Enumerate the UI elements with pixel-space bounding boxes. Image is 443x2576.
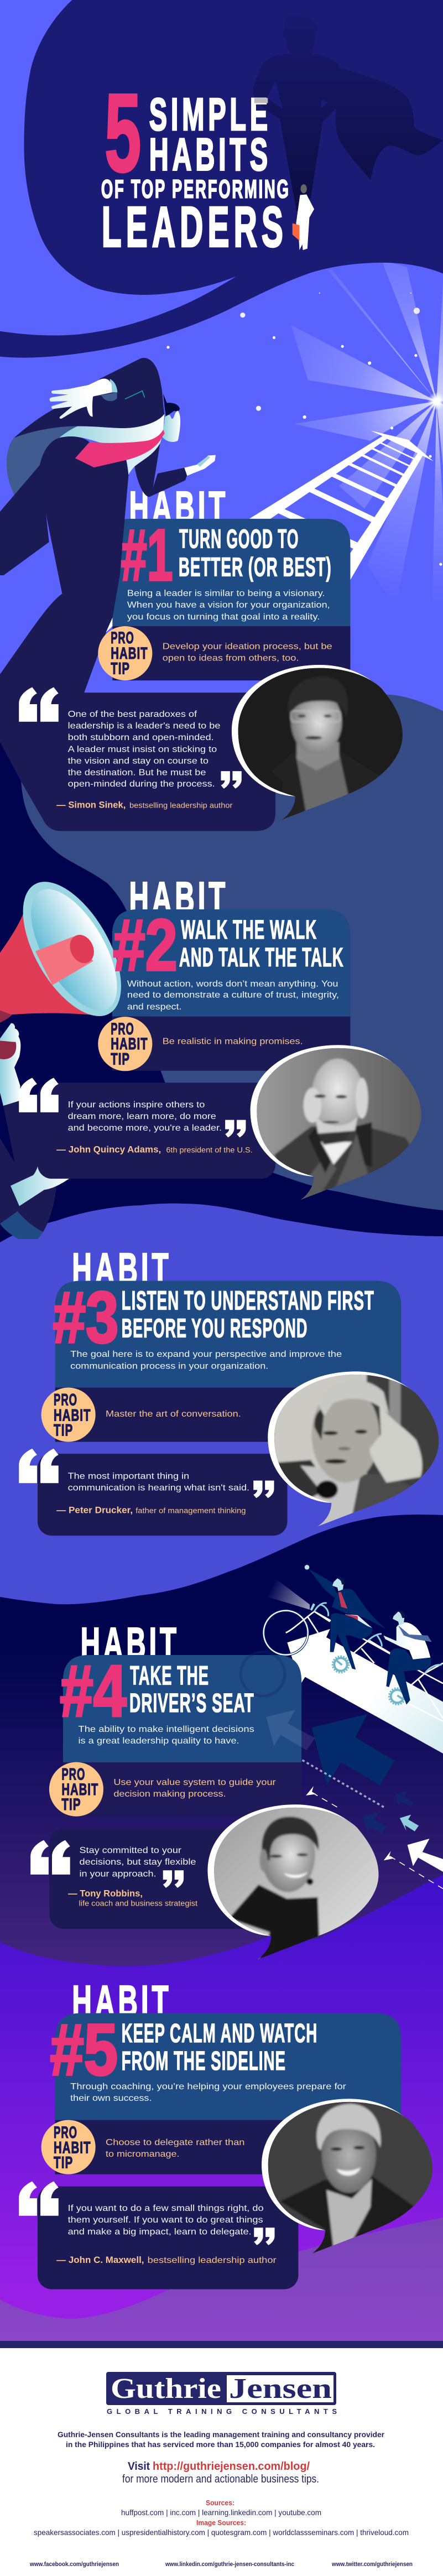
icon: opening quote	[30, 1840, 70, 1875]
panel: habit 1 text	[19, 514, 410, 831]
logo: Guthrie Jensen: Guthrie	[111, 2373, 221, 2405]
card	[55, 1281, 401, 1442]
heading: habit 5 word: HABIT	[72, 1976, 172, 2026]
light rays from star	[291, 260, 443, 607]
badge: pro habit tip: PRO	[61, 1765, 85, 1783]
logo: Guthrie Jensen	[106, 2372, 337, 2416]
text block: Drucker quote	[68, 1472, 249, 1492]
section 5 lower wave	[0, 2218, 443, 2341]
text block: sources: Sources:	[206, 2499, 234, 2507]
badge: pro habit tip: PRO	[54, 1391, 77, 1409]
badge: pro habit tip	[98, 1017, 152, 1071]
badge: pro habit tip: HABIT	[111, 644, 148, 663]
attribution: John C. Maxwell: bestselling leadership author	[148, 2256, 277, 2265]
text block: habit 3 description: communication process in your organization.	[70, 1361, 268, 1371]
rider 1	[309, 1569, 337, 1599]
text block: habit 2 description: and respect.	[127, 1002, 181, 1012]
text block: Robbins quote: Stay committed to your	[80, 1846, 182, 1855]
text block: Adams quote: and become more, you're a leader.	[68, 1123, 222, 1133]
bike frames	[286, 1611, 443, 1721]
badge: pro habit tip: HABIT	[54, 2138, 91, 2157]
icon: closing quote	[253, 1481, 274, 1498]
text block: habit 3 description: The goal here is to expand your perspective and improve the	[70, 1350, 342, 1359]
heading: walk the walk: WALK THE WALK	[181, 915, 317, 945]
badge: pro habit tip: TIP	[54, 1421, 73, 1439]
heading: turn good to better	[179, 524, 332, 582]
text block: visit blog: Visit	[128, 2460, 150, 2473]
text block: sources: huffpost.com | inc.com | learning.linkedin.com | youtube.com	[121, 2508, 321, 2517]
panel: habit 2 text	[19, 904, 428, 1207]
heading: number 2: #2	[113, 904, 178, 986]
text block: habit 4 tip	[113, 1778, 276, 1799]
logo: Guthrie Jensen: Jensen	[229, 2373, 332, 2405]
section 3 background	[0, 1204, 443, 1604]
text block: social links: www.linkedin.com/guthrie-jensen-consultants-inc	[165, 2561, 294, 2568]
badge: pro habit tip: HABIT	[111, 1035, 148, 1053]
text block: habit 1 tip: Develop your ideation process, but be	[163, 642, 332, 651]
illustration: running leader	[0, 358, 216, 818]
heading: turn good to better: BETTER (OR BEST)	[179, 553, 332, 582]
text block: habit 1 tip	[163, 642, 332, 663]
text block: social links	[29, 2561, 413, 2568]
panel: habit 2 card	[112, 909, 350, 1071]
text block: Adams quote	[68, 1100, 222, 1133]
wheel	[264, 1611, 308, 1655]
panel: habit 5	[19, 2009, 440, 2289]
text block: Adams quote: dream more, learn more, do more	[68, 1112, 216, 1121]
heading: number 1: #1	[121, 514, 173, 596]
text block: habit 4 description: The ability to make intelligent decisions	[79, 1725, 254, 1734]
attribution: Tony Robbins: — Tony Robbins,	[68, 1888, 143, 1898]
illustration: megaphone and arm	[0, 866, 141, 1239]
text block: habit 1 description: When you have a vision for your organization,	[127, 600, 330, 610]
text block: habit 1 description	[127, 589, 330, 622]
title: OF TOP PERFORMING	[101, 175, 290, 204]
heading: habit 2 word: HABIT	[129, 873, 228, 922]
text block: habit 4 tip: decision making process.	[113, 1789, 226, 1799]
section 1 background	[0, 0, 443, 785]
text block: Maxwell quote: If you want to do a few small things right, do	[68, 2204, 264, 2213]
text block: habit 4 description: is a great leadership quality to have.	[79, 1736, 239, 1746]
portrait: Simon Sinek	[231, 665, 403, 820]
panel: habit 4 quote	[30, 1829, 275, 1929]
badge: pro habit tip: TIP	[111, 1050, 130, 1069]
attribution: Peter Drucker: — Peter Drucker,	[56, 1505, 133, 1515]
badge: pro habit tip: PRO	[54, 2124, 77, 2142]
icon: opening quote	[19, 1449, 59, 1483]
title: HABITS	[149, 129, 272, 180]
heading: take the driver's seat	[129, 1661, 254, 1718]
title	[101, 71, 290, 258]
text block: Robbins quote: in your approach.	[80, 1870, 156, 1879]
panel: habit 4	[30, 1650, 385, 1966]
text block: Sinek quote: A leader must insist on sticking to	[68, 745, 217, 754]
attribution: Simon Sinek	[56, 800, 233, 810]
text block: habit 5 description: Through coaching, you’re helping your employees prepare for	[70, 2082, 347, 2091]
text block: Sinek quote: open-minded during the process.	[68, 779, 215, 789]
panel: habit 3	[19, 1277, 443, 1536]
card	[55, 2013, 401, 2174]
badge: pro habit tip	[49, 1762, 103, 1817]
text block: company description	[58, 2430, 385, 2449]
attribution: Tony Robbins: life coach and business strategist	[79, 1900, 197, 1908]
attribution: John Quincy Adams	[56, 1144, 253, 1154]
badge: pro habit tip: HABIT	[61, 1781, 98, 1799]
text block: Maxwell quote: them yourself. If you want to do great things	[68, 2215, 263, 2225]
text block: habit 5 tip	[106, 2138, 244, 2159]
large navy arrow	[311, 1714, 395, 1785]
heading: number 5: #5	[50, 2009, 118, 2090]
card	[63, 1652, 315, 1817]
attribution: Simon Sinek: — Simon Sinek,	[56, 800, 126, 810]
panel: habit 2 quote	[19, 1078, 275, 1179]
heading: habit 4 word: HABIT	[81, 1619, 180, 1668]
badge: pro habit tip: PRO	[111, 629, 134, 647]
attribution: John Quincy Adams: — John Quincy Adams,	[56, 1144, 161, 1154]
heading: habit 1 word: HABIT	[129, 482, 228, 532]
text block: social links: www.twitter.com/guthriejensen	[331, 2561, 413, 2568]
text block: Drucker quote: The most important thing in	[68, 1472, 189, 1481]
text block: Adams quote: If your actions inspire others to	[68, 1100, 205, 1110]
footer bar	[0, 2341, 443, 2348]
text block: Sinek quote	[68, 710, 221, 789]
panel: habit 1 quote	[19, 687, 275, 831]
attribution: John C. Maxwell: — John C. Maxwell,	[56, 2255, 144, 2265]
heading: walk the walk	[179, 915, 344, 972]
text block: Drucker quote: communication is hearing what isn't said.	[68, 1483, 249, 1492]
attribution: John C. Maxwell	[56, 2255, 277, 2265]
attribution: John Quincy Adams: 6th president of the U.S.	[166, 1146, 253, 1154]
badge: pro habit tip	[41, 1388, 96, 1442]
portrait: Peter Drucker	[268, 1367, 443, 1533]
badge: pro habit tip	[41, 2120, 96, 2174]
text block: habit 5 description: their own success.	[70, 2094, 152, 2103]
icon: closing quote	[163, 1870, 184, 1888]
portrait: John Quincy Adams	[250, 1045, 421, 1200]
attribution: Tony Robbins	[68, 1888, 197, 1908]
section 2 slate wave	[21, 695, 443, 1210]
badge: pro habit tip: TIP	[54, 2153, 73, 2172]
rider 2	[383, 1622, 430, 1659]
text block: company description: in the Philippines that has serviced more than 15,000 companies for almost 40 years.	[66, 2440, 375, 2449]
heading: take the driver's seat: DRIVER’S SEAT	[129, 1688, 254, 1718]
text block: habit 5 tip: Choose to delegate rather than	[106, 2138, 244, 2147]
text block: habit 2 description: Without action, words don’t mean anything. You	[127, 980, 338, 989]
text block: Sinek quote: the vision and stay on course to	[68, 756, 209, 766]
heading: habit 3 word: HABIT	[72, 1244, 172, 1293]
section 2 navy background	[0, 736, 443, 1272]
text block: visit blog	[122, 2460, 319, 2485]
text block: visit blog: http://guthriejensen.com/blog/	[153, 2460, 310, 2473]
text block: habit 1 tip: open to ideas from others, too.	[163, 653, 299, 663]
text block: Maxwell quote: and make a big impact, learn to delegate.	[68, 2228, 252, 2237]
text block: habit 2 description: need to demonstrate a culture of trust, integrity,	[127, 990, 339, 1000]
heading: listen to understand	[122, 1286, 374, 1344]
heading: keep calm	[122, 2018, 317, 2076]
text block: habit 3 description	[70, 1350, 342, 1371]
title: LEADERS	[102, 195, 288, 258]
text block: habit 5 tip: to micromanage.	[106, 2150, 179, 2159]
badge: pro habit tip	[98, 626, 152, 680]
portrait: John C. Maxwell	[262, 2099, 432, 2254]
text block: habit 1 description: you focus on turning that goal into a reality.	[127, 612, 320, 622]
text block: habit 4 tip: Use your value system to guide your	[113, 1778, 276, 1787]
text block: Robbins quote: decisions, but stay flexible	[80, 1857, 196, 1867]
heading: number 3: #3	[53, 1277, 119, 1358]
panel: habit 5 quote	[19, 2181, 298, 2289]
attribution: Simon Sinek: bestselling leadership author	[129, 802, 233, 810]
section 5 background	[0, 1825, 443, 2341]
text block: habit 1 description: Being a leader is similar to being a visionary.	[127, 589, 325, 598]
heading: turn good to better: TURN GOOD TO	[179, 524, 299, 554]
attribution: Peter Drucker: father of management thinking	[135, 1506, 246, 1515]
attribution: Peter Drucker	[56, 1505, 246, 1515]
text block: visit blog: for more modern and actionable business tips.	[122, 2473, 319, 2485]
text block: Sinek quote: One of the best paradoxes of	[68, 710, 197, 719]
dark title swoosh	[0, 0, 443, 358]
badge: pro habit tip: TIP	[111, 659, 130, 678]
section 4 background	[0, 1493, 443, 1966]
heading: number 4: #4	[60, 1650, 127, 1731]
text block: Sinek quote: leadership is a leader's need to be	[68, 721, 221, 731]
panel: habit 3 quote	[19, 1449, 288, 1536]
text block: habit 5 description	[70, 2082, 347, 2103]
text block: sources	[34, 2499, 409, 2537]
text block: Sinek quote: both stubborn and open-minded.	[68, 733, 214, 742]
heading: keep calm: FROM THE SIDELINE	[122, 2046, 286, 2076]
icon: closing quote	[254, 2228, 275, 2245]
text block: habit 4 description	[79, 1725, 254, 1746]
ladder	[249, 430, 434, 580]
text block: habit 3 tip: Master the art of conversation.	[106, 1409, 241, 1419]
text block: Robbins quote	[80, 1846, 196, 1879]
icon: opening quote	[19, 1078, 59, 1112]
icon: small businessman with briefcase	[293, 184, 314, 250]
logo: Guthrie Jensen: GLOBAL TRAINING CONSULTANTS	[107, 2407, 337, 2416]
stars	[166, 293, 443, 566]
badge: pro habit tip: PRO	[111, 1020, 134, 1038]
title: SIMPLE	[149, 89, 272, 140]
heading: take the driver's seat: TAKE THE	[130, 1661, 209, 1691]
text block: habit 2 tip: Be realistic in making promises.	[163, 1037, 303, 1047]
badge: pro habit tip: TIP	[61, 1796, 81, 1814]
shadow of superhero	[253, 17, 443, 212]
text block: Maxwell quote	[68, 2204, 264, 2237]
text block: habit 2 description	[127, 980, 339, 1012]
text block: Sinek quote: the destination. But he must be	[68, 768, 206, 777]
gears	[332, 1656, 405, 1705]
text block: sources: speakersassociates.com | uspresidentialhistory.com | quotesgram.com | worldclassseminars.com | thriveloud.com	[34, 2528, 409, 2537]
icon: closing quote	[225, 1120, 246, 1137]
text block: sources: Image Sources:	[196, 2518, 246, 2527]
icon: closing quote	[221, 771, 242, 789]
footer	[29, 2372, 413, 2568]
illustration: arrows and tandem bike riders	[264, 1565, 443, 1888]
badge: pro habit tip: HABIT	[54, 1406, 91, 1424]
panel: habit 1 card	[112, 519, 350, 680]
text block: social links: www.facebook.com/guthriejensen	[29, 2561, 119, 2568]
icon: opening quote	[19, 2181, 59, 2216]
title: 5	[105, 71, 141, 195]
icon: opening quote	[19, 687, 59, 722]
portrait: Tony Robbins	[207, 1804, 378, 1959]
big white arrow	[287, 1629, 443, 1753]
text block: company description: Guthrie-Jensen Consultants is the leading management training and consultancy provider	[58, 2430, 385, 2439]
